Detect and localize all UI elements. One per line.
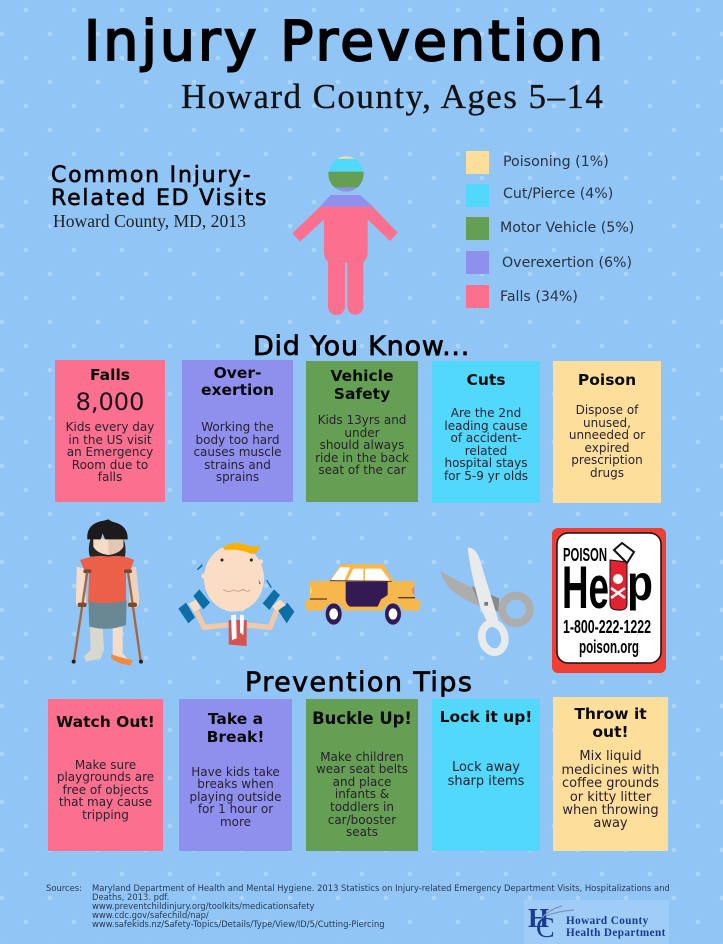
source list: www.preventchildinjury.org/toolkits/medicationsafety: [92, 901, 315, 911]
card text: [66, 420, 154, 484]
source list: www.safekids.nz/Safety-Topics/Details/Type/View/ID/5/Cutting-Piercing: [92, 919, 385, 929]
card title: Break!: [207, 728, 264, 746]
card: poison: [553, 361, 661, 503]
card text: causes muscle: [193, 445, 282, 459]
card title: Cuts: [466, 371, 506, 389]
card text: Lock away: [452, 760, 520, 775]
card: buckle up: [306, 699, 418, 851]
card text: tripping: [82, 808, 129, 822]
card text: in the US visit: [68, 433, 152, 447]
card text: medicines with: [561, 763, 660, 778]
statistic: 8,000: 8,000: [76, 388, 144, 416]
card text: [189, 765, 282, 829]
swatch: overexertion: [466, 251, 489, 274]
card text: sharp items: [448, 774, 524, 789]
panel: common injury heading: [51, 163, 268, 231]
card title: Throw it: [574, 705, 647, 723]
swatch: cut/pierce: [466, 184, 489, 207]
card text: hospital stays: [444, 456, 528, 470]
sources: [46, 883, 670, 929]
card text: breaks when: [197, 777, 274, 791]
card text: leading cause: [444, 419, 528, 433]
icon: tired boy lifting dumbbells: [178, 543, 294, 646]
card text: falls: [98, 470, 122, 484]
card title: Over-: [214, 364, 261, 382]
icon: body figure split by injury type: [292, 156, 398, 316]
label: falls: Falls (34%): [500, 289, 578, 305]
heading: common injury-related ED visits: [51, 163, 268, 211]
card text: seat of the car: [318, 463, 406, 477]
card text: and place: [333, 775, 391, 789]
source list: Maryland Department of Health and Mental Hygiene. 2013 Statistics on Injury-related Emergency Department Visits, Hospitalizations and: [92, 883, 670, 893]
card text: [569, 403, 646, 480]
icon: Poison Help logo: p: [627, 555, 653, 611]
icon: girl on crutches: [72, 519, 143, 666]
card: throw it out: [553, 697, 668, 851]
sources label: Sources:: [46, 883, 82, 893]
subheading: location and year: Howard County, MD, 2013: [53, 211, 246, 231]
card text: Make children: [320, 750, 404, 764]
card text: unneeded or: [569, 428, 645, 442]
logo text: Howard County: [566, 915, 649, 927]
card text: of accident-: [451, 431, 521, 445]
card text: for 1 hour or: [198, 802, 273, 816]
card text: Room due to: [72, 458, 148, 472]
logo mark: C: C: [536, 913, 555, 944]
card: watch out: [48, 699, 163, 851]
card text: [193, 420, 282, 484]
swatch: poisoning: [466, 151, 489, 174]
icon: yellow car: [306, 564, 420, 625]
source list: [92, 883, 670, 929]
icon: Poison Help logo: POISON: [563, 545, 607, 565]
label: poisoning: Poisoning (1%): [503, 154, 609, 170]
card text: Are the 2nd: [451, 406, 521, 420]
card text: Dispose of: [576, 403, 638, 417]
logo mark: H: H: [528, 903, 549, 933]
card: lock it up: [432, 699, 540, 851]
card title: out!: [592, 723, 629, 741]
card: overexertion: [182, 360, 293, 502]
card: cuts: [432, 361, 540, 503]
card text: coffee grounds: [562, 776, 659, 791]
card text: Working the: [201, 420, 274, 434]
card text: Mix liquid: [579, 749, 642, 764]
card text: away: [593, 816, 628, 831]
heading: common injury-related ED visits: Related ED Visits: [51, 186, 268, 211]
icon: Poison Help logo: poison.org: [579, 637, 639, 657]
card text: unused,: [583, 416, 631, 430]
logo: Howard County Health Department: [524, 900, 669, 944]
card: take a break: [179, 699, 292, 851]
card text: body too hard: [196, 433, 280, 447]
heading: prevention tips: Prevention Tips: [245, 667, 473, 698]
source list: Deaths, 2013. pdf.: [92, 892, 169, 902]
card text: car/booster: [328, 813, 396, 827]
card text: Make sure: [75, 758, 136, 772]
card title: Poison: [578, 371, 636, 389]
card text: strains and: [204, 458, 271, 472]
title: Injury Prevention: [84, 9, 606, 73]
card text: an Emergency: [67, 445, 153, 459]
icon: Poison Help logo: [552, 528, 666, 673]
card title: Safety: [334, 384, 390, 402]
card text: [57, 758, 154, 822]
card text: free of objects: [62, 783, 149, 797]
card text: [448, 760, 524, 789]
card text: Kids every day: [66, 420, 154, 434]
card text: ride in the back: [315, 451, 409, 465]
card text: should always: [320, 438, 404, 452]
card text: playgrounds are: [57, 770, 154, 784]
card text: wear seat belts: [316, 762, 408, 776]
card title: Lock it up!: [440, 708, 532, 726]
logo text: Health Department: [566, 926, 666, 938]
icon: scissors: [440, 548, 534, 656]
icon: Poison Help logo: He: [562, 554, 609, 621]
card text: that may cause: [59, 795, 152, 809]
label: overexertion: Overexertion (6%): [502, 255, 632, 271]
card title: Vehicle: [330, 367, 394, 385]
logo text: [566, 915, 666, 938]
card text: for 5-9 yr olds: [444, 469, 528, 483]
card title: Take a: [208, 710, 263, 728]
swatch: falls: [466, 285, 489, 308]
card text: related: [465, 444, 507, 458]
card title: [574, 705, 647, 741]
card text: [315, 413, 409, 477]
heading: common injury-related ED visits: Common Injury-: [51, 163, 252, 188]
label: cut/pierce: Cut/Pierce (4%): [503, 186, 613, 202]
card: vehicle safety: [306, 361, 418, 502]
card text: Have kids take: [191, 765, 280, 779]
card: falls: [55, 360, 165, 502]
card text: [444, 406, 528, 483]
label: motor vehicle: Motor Vehicle (5%): [500, 220, 634, 236]
logo mark: wheat: [542, 906, 574, 918]
card title: Falls: [90, 366, 130, 384]
card text: when throwing: [562, 803, 659, 818]
subtitle: Howard County, Ages 5–14: [181, 77, 604, 116]
card text: seats: [346, 825, 378, 839]
card title: [201, 364, 274, 399]
card text: expired: [585, 441, 629, 455]
card text: Kids 13yrs and: [318, 413, 406, 427]
icon: Poison Help logo: 1-800-222-1222: [563, 617, 651, 637]
card text: prescription: [571, 453, 643, 467]
card text: under: [344, 426, 380, 440]
card title: [207, 710, 264, 746]
card text: sprains: [216, 470, 259, 484]
card text: toddlers in: [330, 800, 394, 814]
card title: Watch Out!: [56, 713, 155, 731]
card text: more: [220, 815, 251, 829]
card text: [561, 749, 660, 831]
legend: [466, 151, 634, 308]
card title: Buckle Up!: [312, 709, 412, 728]
card text: infants &: [335, 787, 389, 801]
card text: drugs: [590, 466, 624, 480]
card text: playing outside: [189, 790, 282, 804]
card text: [316, 750, 408, 839]
source list: www.cdc.gov/safechild/nap/: [92, 910, 209, 920]
heading: did you know: Did You Know...: [253, 331, 470, 362]
card title: [330, 367, 394, 402]
card title: exertion: [201, 381, 274, 399]
swatch: motor vehicle: [466, 217, 489, 240]
card text: or kitty litter: [570, 790, 651, 805]
